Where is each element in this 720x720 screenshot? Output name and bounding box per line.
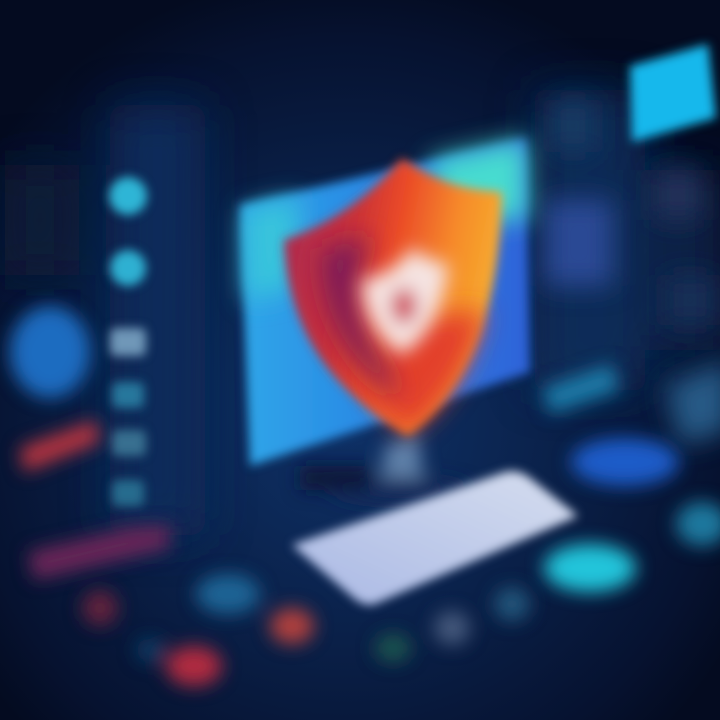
security shield	[284, 158, 502, 436]
bottom dots	[82, 574, 530, 686]
list of sidebar icons	[109, 177, 147, 506]
keyboard	[292, 471, 578, 605]
floating tile: blue right	[571, 438, 679, 486]
shield lower red	[370, 310, 485, 432]
screen teal glow	[244, 138, 528, 300]
floating tile: teal small	[542, 364, 720, 546]
panel: top right cyan square	[630, 44, 716, 142]
blue circle on the left	[10, 306, 90, 398]
shield inner shading	[322, 235, 398, 398]
panel: right side tiles	[545, 100, 720, 445]
monitor stand	[300, 432, 470, 502]
computer monitor	[240, 138, 530, 466]
floating tile: cyan right	[544, 544, 636, 592]
red bars on the left	[20, 420, 170, 580]
shield emblem	[362, 248, 448, 354]
background panels	[5, 90, 720, 535]
